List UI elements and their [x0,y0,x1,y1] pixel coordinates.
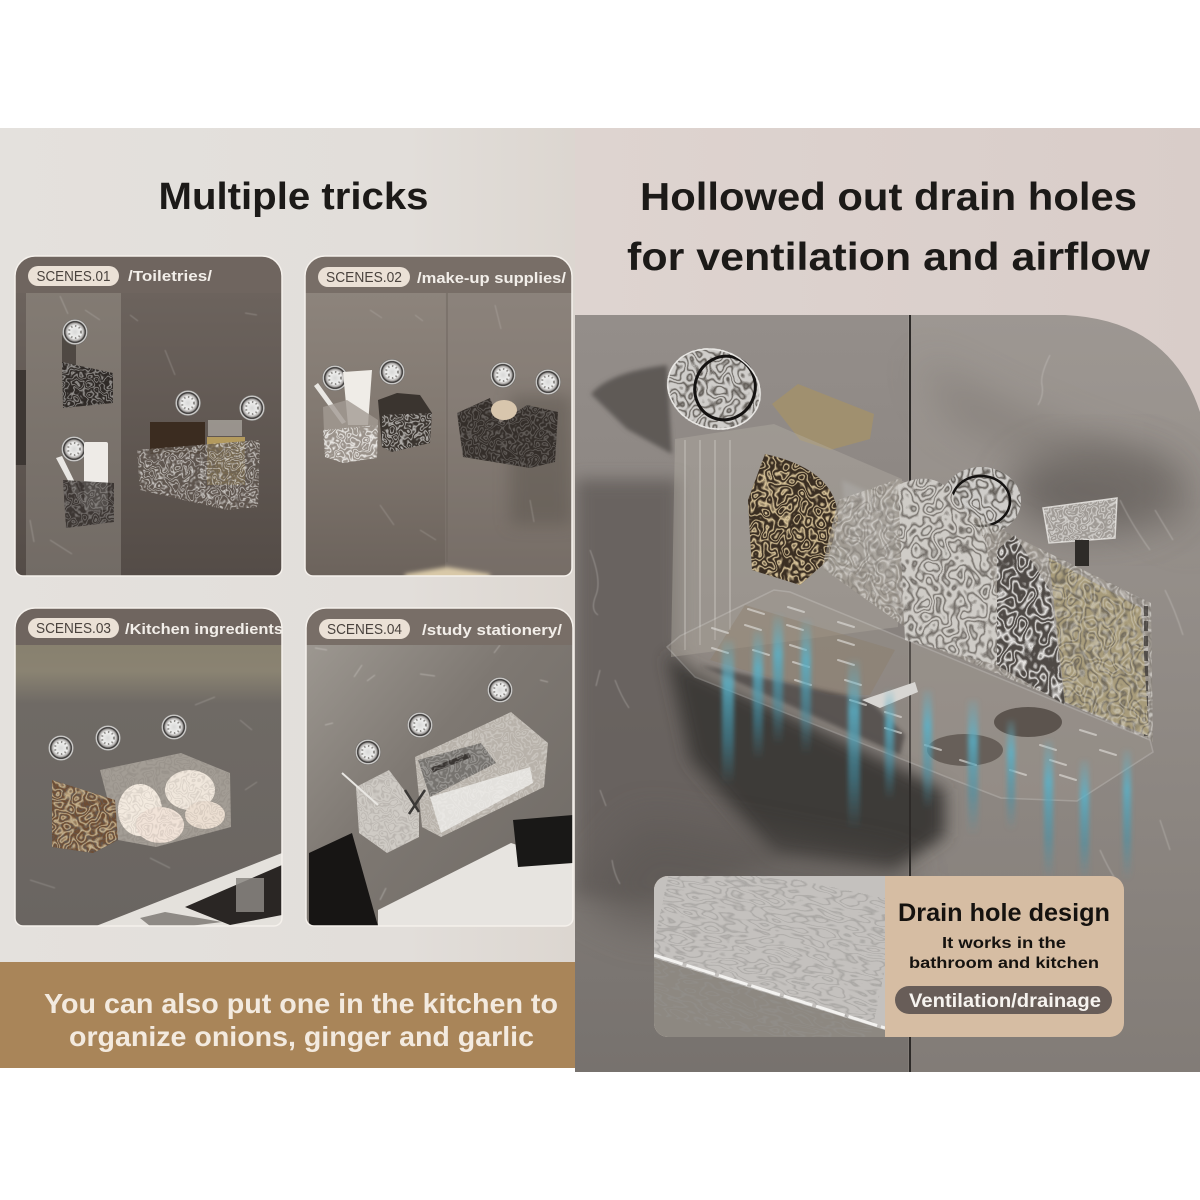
panel: drain holes (right half) [575,128,1200,1072]
clear organizers with scissors and notes [342,677,551,856]
scene 1 card outline [15,256,282,576]
scene 4 caption: /study stationery/ [422,622,563,639]
left suction cup [666,348,761,430]
left panel background [0,128,575,1068]
clear front wall [820,477,1155,745]
dark double holder with brush [455,362,561,470]
heading line 1: Hollowed out drain holes [640,176,1137,219]
blue airflow streams [722,615,1131,880]
card title: Drain hole design [898,899,1110,927]
scene 3 photo background [15,608,282,926]
drain hole slots [712,607,1116,780]
card text line 2: bathroom and kitchen [909,955,1099,972]
scene 3 label pill: SCENES.03 [36,621,111,637]
large basket with cosmetics [136,390,265,512]
card text line 1: It works in the [942,935,1066,952]
band text line 1: You can also put one in the kitchen to [44,988,558,1019]
scene 2 label pill [318,267,410,287]
clear holder with tube and dark holder [314,359,432,464]
card tan background [654,876,1124,1037]
clear base tray with drain holes [667,590,1153,801]
bottom caption band [0,962,575,1068]
perfume cap [1041,496,1119,566]
dark holder with tube and toothbrush [56,436,116,530]
scene 1 caption: /Toiletries/ [128,268,213,285]
shadows cast on the wall [575,360,1200,930]
clear back plate with vertical ribs [671,424,902,657]
drain hole design card [654,876,1124,1037]
water droplet swatch photo [654,876,885,1037]
scene card 3: kitchen ingredients [15,608,283,926]
scene card 4: study stationery [306,608,573,926]
heading line 2: for ventilation and airflow [627,236,1151,279]
heading: Multiple tricks: Multiple tricks [158,176,428,218]
silver cloth [896,470,999,667]
ventilation pill: Ventilation/drainage [909,991,1101,1012]
band text line 2: organize onions, ginger and garlic [69,1021,534,1052]
scene 4 label pill: SCENES.04 [327,622,402,638]
scene 2 caption: /make-up supplies/ [417,270,567,287]
small dark holder with suction cup [62,319,114,410]
right panel background [575,128,1200,1072]
scene 3 card outline [15,608,282,926]
gold bottle body [1047,556,1151,738]
back suction cup [940,466,1022,536]
ventilation pill [895,986,1112,1014]
scene 1 label pill: SCENES.01 [36,269,110,285]
marble wall left and right [575,315,1200,1072]
brown speckled contents [746,452,840,587]
panel: multiple tricks (left half) [0,128,575,1068]
scene card 2: make-up supplies [305,256,572,580]
scene 2 photo background [305,256,572,580]
dark patterned cloth [995,533,1067,707]
scene 1 photo background [15,256,282,576]
divider seam [909,315,911,1072]
scene 4 card outline [306,608,573,926]
scene 2 card outline [305,256,572,576]
scene 3 caption: /Kitchen ingredients [125,621,283,638]
scene card 1: toiletries [15,256,282,576]
scene 2 label pill: SCENES.02 [326,270,402,286]
baskets with spices and garlic [48,714,233,856]
main product photo [575,315,1200,1072]
scene 4 photo background [306,608,573,926]
amber bottle cap [772,384,874,450]
marble veins [590,355,1183,900]
